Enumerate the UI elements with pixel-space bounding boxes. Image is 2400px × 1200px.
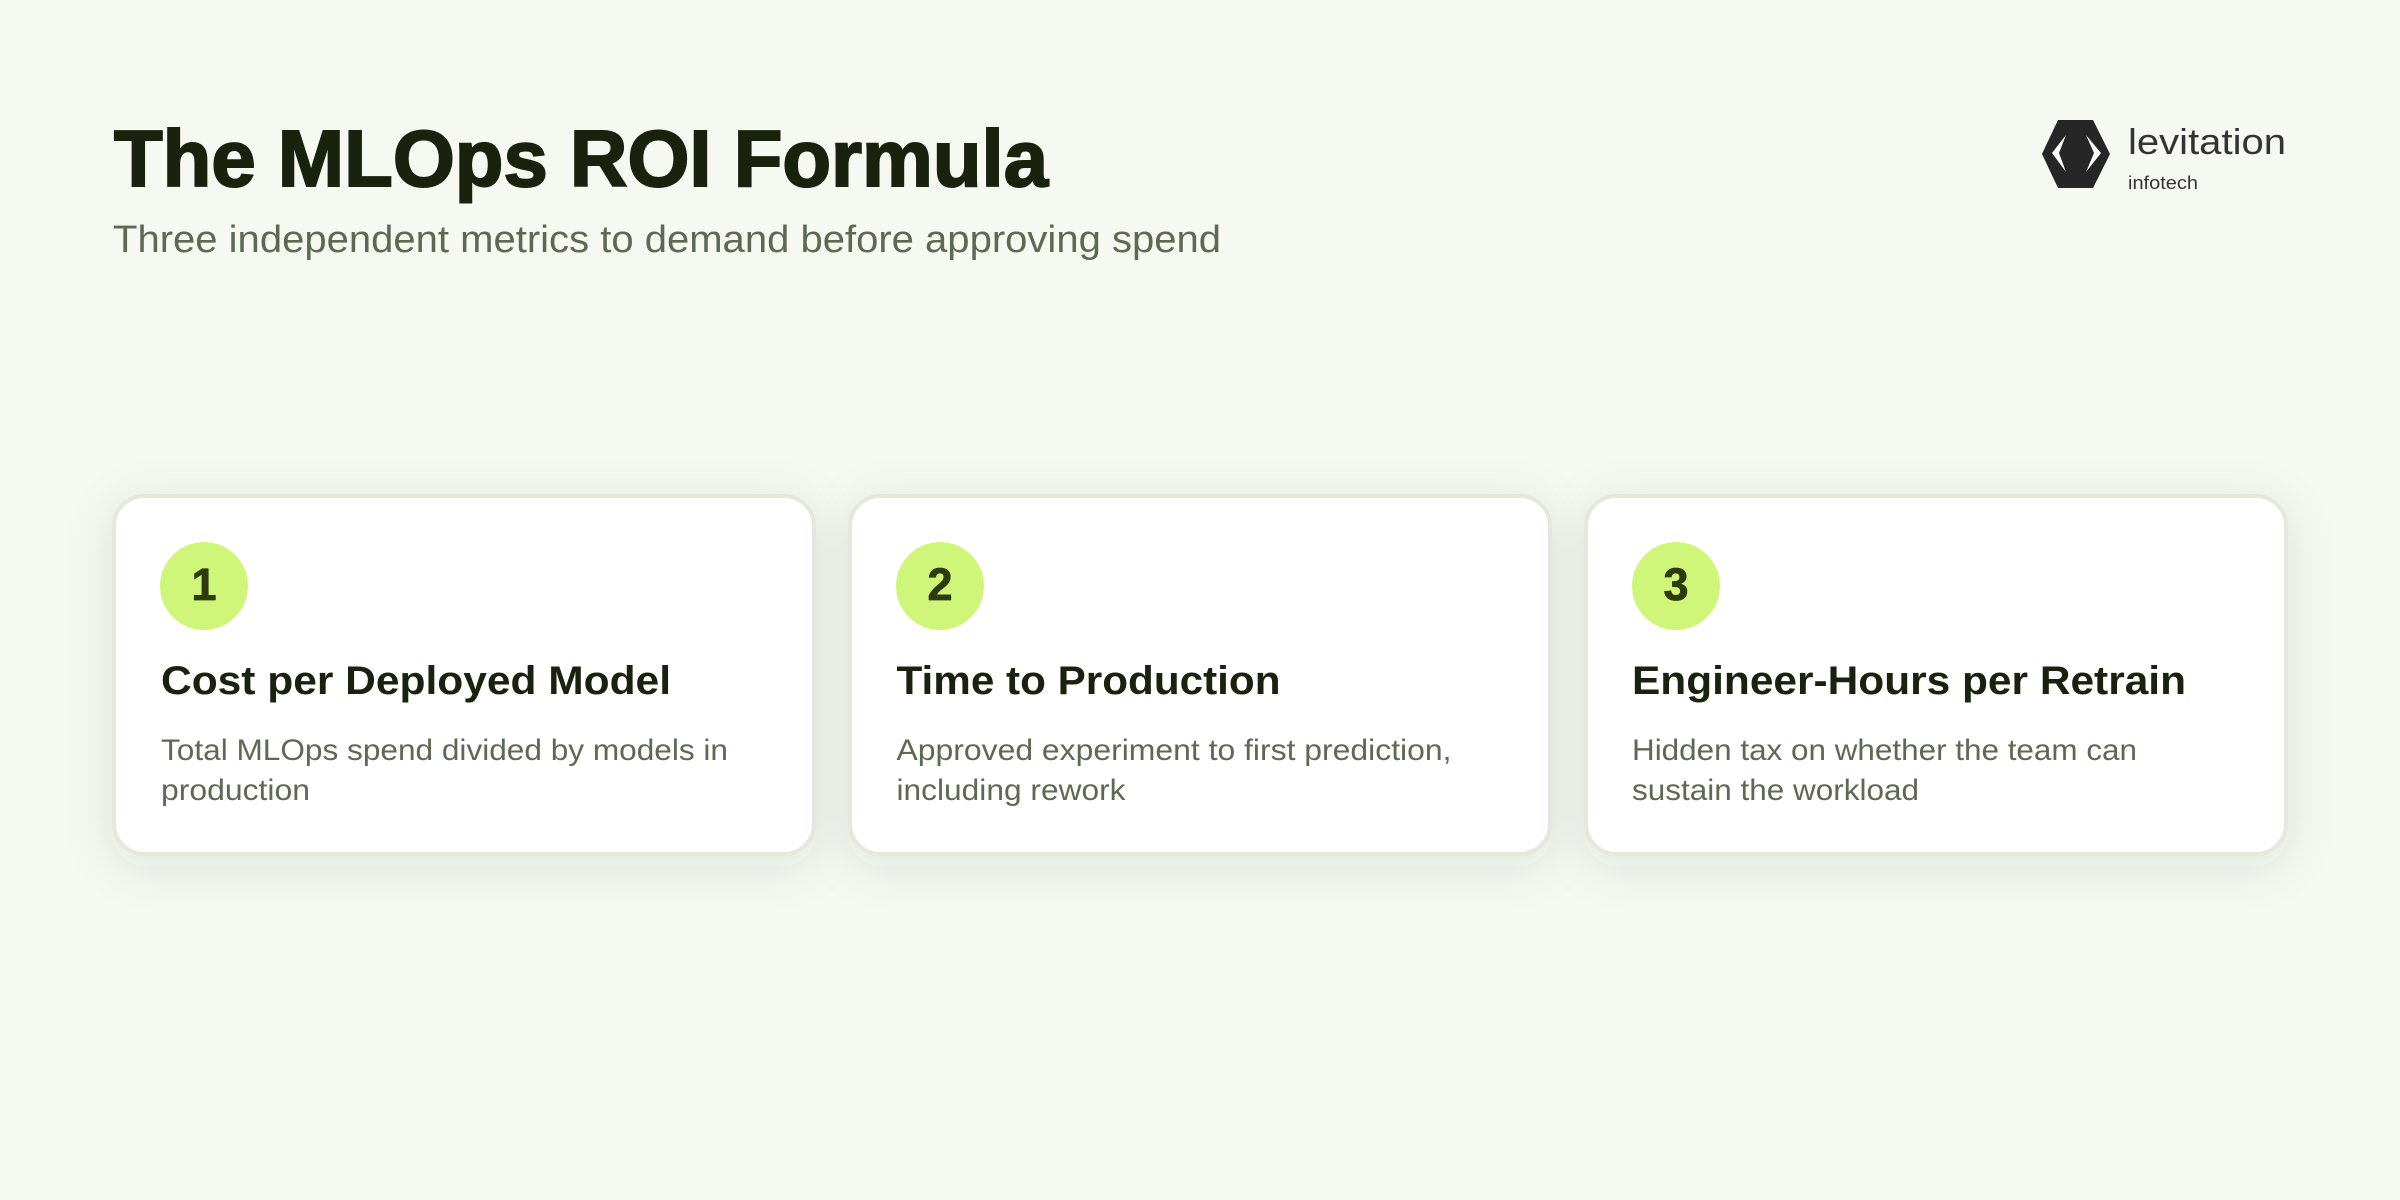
- card description: [896, 734, 1452, 807]
- subtitle: Three independent metrics to demand before approving spend: [113, 219, 1221, 261]
- number badge 1: 1: [191, 559, 217, 610]
- title: The MLOps ROI Formula: [114, 114, 1049, 203]
- logo sub-wordmark: infotech: [2128, 173, 2198, 193]
- card description: Approved experiment to first prediction,: [896, 734, 1452, 767]
- panel: engineer-hours per retrain: [1584, 496, 2288, 866]
- number badge 2: 2: [927, 559, 953, 610]
- card description: Hidden tax on whether the team can: [1632, 734, 2137, 767]
- card heading: Engineer-Hours per Retrain: [1632, 659, 2186, 703]
- panel: time to production: [848, 496, 1552, 866]
- logo: levitation infotech: [2042, 120, 2286, 193]
- number badge 2: [896, 542, 984, 630]
- number badge 1: [160, 542, 248, 630]
- logo wordmark: levitation: [2128, 121, 2286, 162]
- card heading: Cost per Deployed Model: [161, 659, 671, 703]
- card description: Total MLOps spend divided by models in: [161, 734, 728, 767]
- card description: including rework: [896, 774, 1127, 807]
- number badge 3: [1632, 542, 1720, 630]
- icon: hexagon with chevrons: [2042, 120, 2110, 188]
- panel: cost per deployed model: [112, 496, 816, 866]
- card heading: Time to Production: [896, 659, 1280, 703]
- card description: [161, 734, 728, 807]
- number badge 3: 3: [1663, 559, 1689, 610]
- card description: sustain the workload: [1632, 774, 1919, 807]
- card description: [1632, 734, 2137, 807]
- card description: production: [161, 774, 310, 807]
